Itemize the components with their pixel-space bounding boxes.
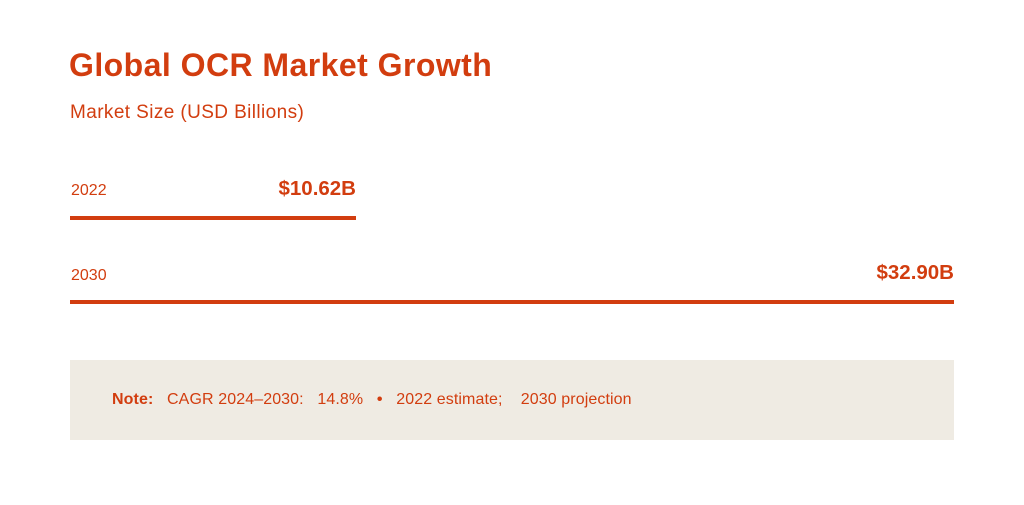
- bar: 2022: [70, 216, 356, 220]
- bar: 2030: [70, 300, 954, 304]
- note box: [70, 360, 954, 440]
- subtitle: Market Size (USD Billions): [70, 102, 304, 123]
- note text: Note: CAGR 2024–2030: 14.8% • 2022 estimate; 2030 projection: [112, 391, 632, 408]
- value: 2030: $32.90B: [876, 261, 954, 284]
- value: 2022: $10.62B: [278, 177, 356, 200]
- bar row: 2022: [70, 177, 356, 220]
- bar row: 2030: [70, 261, 954, 304]
- label: 2030: 2030: [71, 267, 107, 284]
- title: Global OCR Market Growth: [69, 47, 492, 83]
- label: 2022: 2022: [71, 182, 107, 199]
